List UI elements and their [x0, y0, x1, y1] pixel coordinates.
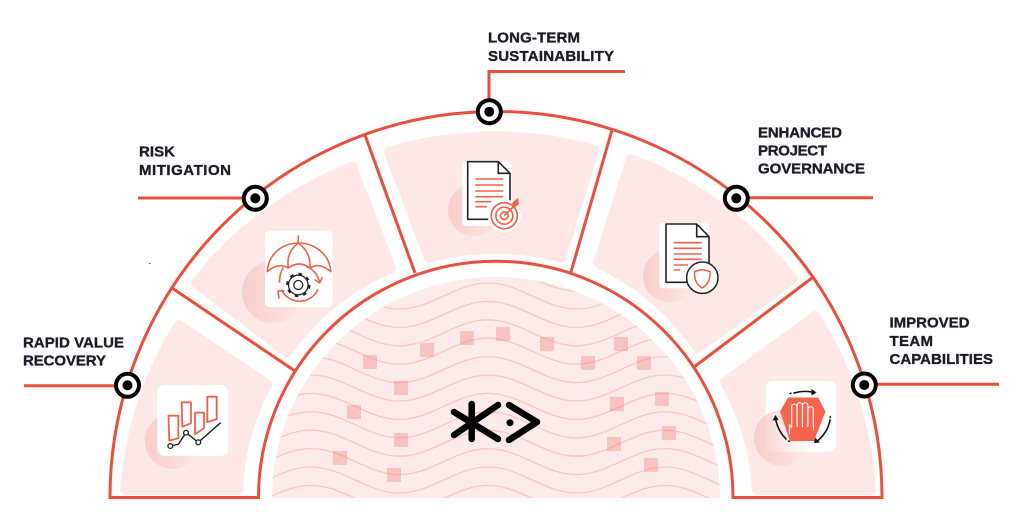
label: enhanced project governance	[758, 124, 865, 178]
marker: improved team capabilities	[853, 374, 876, 396]
arch outline	[110, 111, 882, 497]
label: enhanced project governance: ENHANCED	[758, 124, 842, 141]
panel: improved team capabilities background	[725, 316, 871, 490]
marker: enhanced project governance	[725, 187, 748, 210]
marker: rapid value recovery	[116, 374, 139, 397]
icon: team hand	[754, 381, 836, 466]
panel: long-term sustainability background	[389, 136, 594, 258]
marker: long-term sustainability	[478, 100, 501, 123]
label: rapid value recovery: RAPID VALUE	[23, 334, 124, 352]
label: long-term sustainability: LONG-TERM	[488, 30, 580, 47]
label: long-term sustainability: SUSTAINABILITY	[488, 48, 614, 65]
central dome	[272, 277, 720, 498]
icon: document with target	[448, 162, 521, 236]
leader line: long-term sustainability	[489, 72, 625, 112]
icon: document with shield	[643, 223, 718, 302]
speck	[149, 263, 150, 264]
icon: umbrella and gear	[242, 231, 333, 323]
leader line: rapid value recovery	[24, 384, 128, 387]
leader line: enhanced project governance	[736, 196, 873, 199]
label: improved team capabilities: TEAM	[890, 333, 933, 350]
label: rapid value recovery	[23, 334, 124, 370]
label: rapid value recovery: RECOVERY	[23, 353, 106, 370]
panel: enhanced project governance background	[598, 159, 793, 348]
label: risk mitigation: RISK	[139, 144, 175, 160]
label: enhanced project governance: GOVERNANCE	[758, 161, 865, 178]
leader line: improved team capabilities	[865, 383, 999, 386]
label: enhanced project governance: PROJECT	[758, 143, 827, 160]
label: long-term sustainability	[488, 30, 614, 65]
label: risk mitigation	[139, 144, 231, 179]
label: improved team capabilities: CAPABILITIES	[890, 351, 993, 368]
segment dividers	[172, 130, 812, 371]
label: risk mitigation: MITIGATION	[139, 162, 231, 179]
panel: risk mitigation background	[196, 167, 391, 352]
panel: rapid value recovery background	[125, 325, 267, 490]
icon: rising chart	[145, 385, 228, 469]
leader line: risk mitigation	[138, 196, 255, 200]
label: improved team capabilities: IMPROVED	[890, 315, 970, 332]
label: improved team capabilities	[890, 315, 993, 368]
marker: risk mitigation	[244, 187, 267, 210]
logo	[454, 404, 537, 440]
